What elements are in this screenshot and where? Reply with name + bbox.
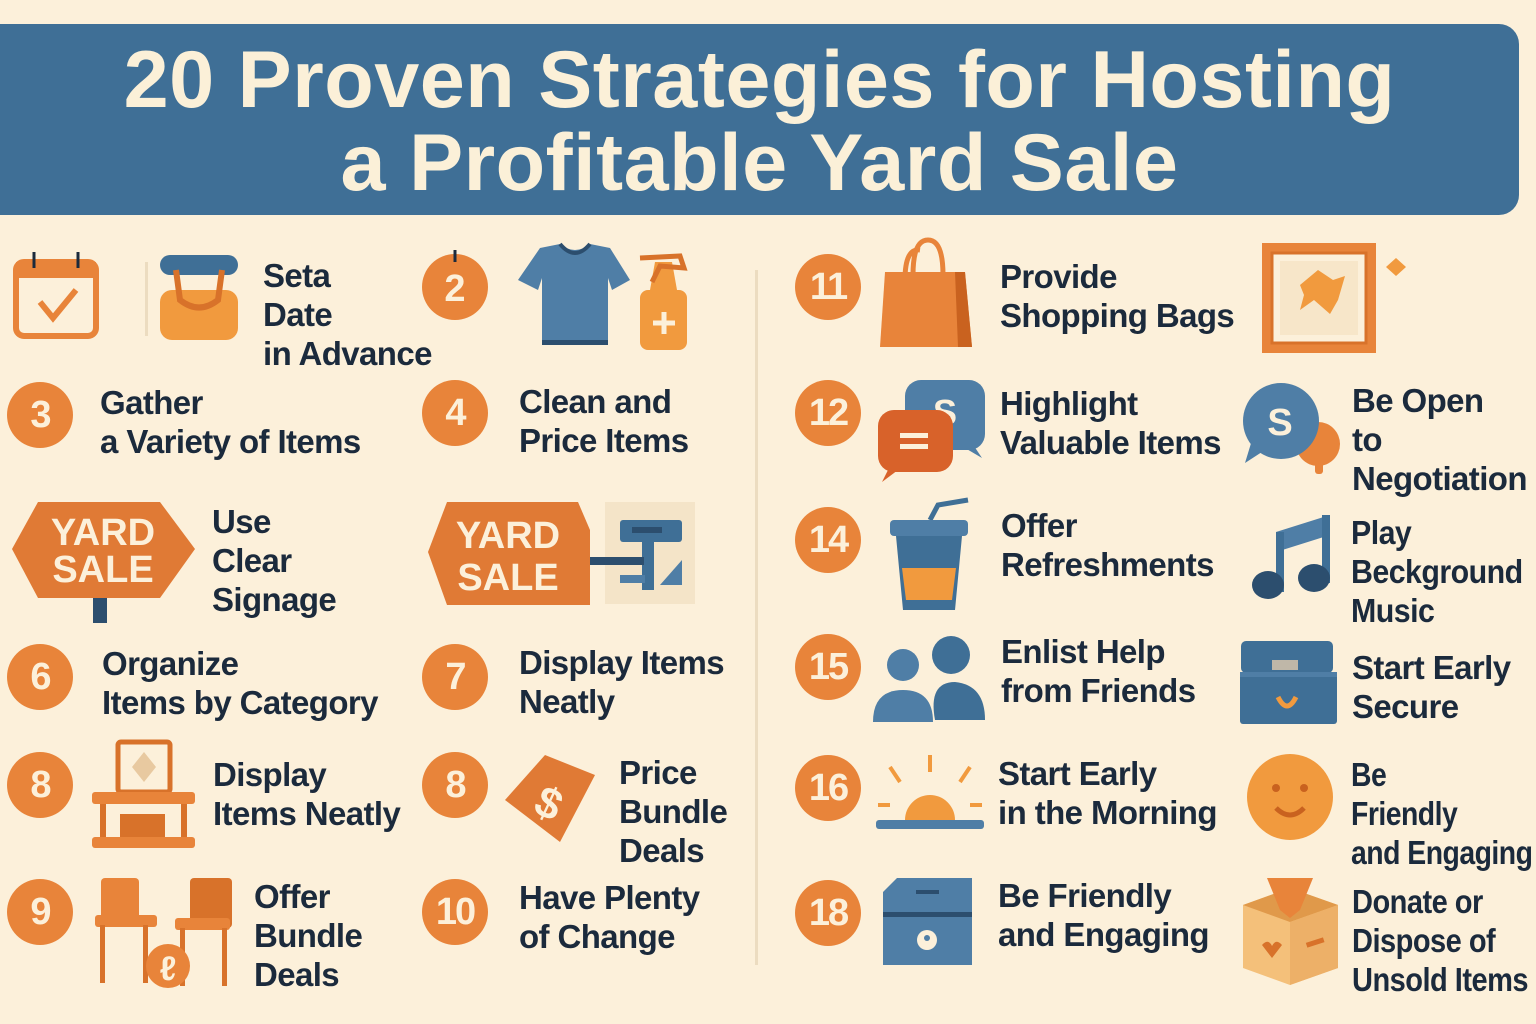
text: gather variety bbox=[100, 384, 361, 460]
icon: calendar bbox=[16, 252, 96, 336]
text: set a date: Date bbox=[263, 296, 332, 333]
text: set a date bbox=[263, 257, 432, 372]
icon: chairs: ℓ bbox=[160, 950, 176, 988]
text: start early secure: Start Early bbox=[1352, 649, 1510, 686]
icon: sunrise bbox=[876, 755, 984, 829]
text: clean and price: Price Items bbox=[519, 422, 689, 459]
text: price bundle deals: Price bbox=[619, 754, 697, 791]
text: enlist help bbox=[1001, 633, 1196, 709]
circle 3: 3 bbox=[30, 394, 50, 436]
text: price bundle deals: Deals bbox=[619, 832, 704, 869]
text: clean and price: Clean and bbox=[519, 383, 671, 420]
text: be friendly right: Friendly bbox=[1351, 795, 1457, 832]
circle 18: 18 bbox=[809, 892, 847, 934]
text: start early morning: Start Early bbox=[998, 755, 1156, 792]
circle 7: 7 bbox=[445, 656, 465, 698]
icon: price tag: $ bbox=[527, 776, 570, 831]
text: gather variety: Gather bbox=[100, 384, 203, 421]
circle 15 bbox=[795, 634, 861, 700]
text: offer bundle deals bbox=[254, 878, 362, 993]
circle 15: 15 bbox=[809, 646, 847, 688]
text: music: Beckground bbox=[1351, 553, 1523, 590]
icon: donation box bbox=[1243, 878, 1338, 985]
text: gather variety: a Variety of Items bbox=[100, 423, 361, 460]
title banner: 20 Proven Strategies for Hosting bbox=[124, 35, 1395, 125]
text: donate: Dispose of bbox=[1352, 922, 1495, 959]
text: refreshments bbox=[1001, 507, 1214, 583]
text: clear signage bbox=[212, 503, 336, 618]
circle 8 right: 8 bbox=[445, 764, 465, 806]
icon: yard sale sign 1: SALE bbox=[52, 549, 154, 591]
circle 11: 11 bbox=[810, 266, 846, 308]
text: clean and price bbox=[519, 383, 689, 459]
text: highlight valuable bbox=[1000, 385, 1221, 461]
icon: negotiation bubble: S bbox=[1267, 402, 1293, 444]
text: set a date: in Advance bbox=[263, 335, 432, 372]
circle 10: 10 bbox=[436, 891, 474, 933]
text: be friendly: Be Friendly bbox=[998, 877, 1171, 914]
circle 10 bbox=[422, 879, 488, 945]
circle 12: 12 bbox=[809, 392, 847, 434]
text: enlist help: from Friends bbox=[1001, 672, 1196, 709]
circle 18 bbox=[795, 880, 861, 946]
circle 2: 2 bbox=[444, 268, 466, 310]
text: negotiation: Negotiation bbox=[1352, 460, 1527, 497]
circle 6: 6 bbox=[30, 656, 50, 698]
icon: shopping bag bbox=[880, 240, 972, 347]
text: start early secure: Secure bbox=[1352, 688, 1458, 725]
column divider bbox=[755, 270, 758, 965]
icon: chat bubbles bbox=[878, 380, 985, 482]
text: start early secure bbox=[1352, 649, 1511, 725]
icon: chairs bbox=[95, 878, 232, 988]
text: donate bbox=[1352, 883, 1528, 998]
icon: music note bbox=[1252, 515, 1330, 599]
text: clear signage: Clear bbox=[212, 542, 292, 579]
text: music: Music bbox=[1351, 592, 1434, 629]
circle 16 bbox=[795, 755, 861, 821]
circle 6 bbox=[7, 644, 73, 710]
text: set a date: Seta bbox=[263, 257, 330, 294]
circle 12 bbox=[795, 380, 861, 446]
text: refreshments: Refreshments bbox=[1001, 546, 1214, 583]
text: donate: Donate or bbox=[1352, 883, 1483, 920]
text: be friendly bbox=[998, 877, 1209, 953]
text: offer bundle deals: Deals bbox=[254, 956, 339, 993]
icon: yard sale sign 1 bbox=[12, 502, 195, 623]
icon: yard sale sign 2 with stand bbox=[428, 502, 695, 605]
title banner bbox=[0, 24, 1519, 215]
circle 3 bbox=[7, 382, 73, 448]
text: price bundle deals bbox=[619, 754, 727, 869]
icon: picture frame bbox=[1262, 243, 1406, 353]
circle 16: 16 bbox=[809, 767, 847, 809]
icon: t-shirt and spray bbox=[518, 244, 687, 350]
text: clear signage: Use bbox=[212, 503, 271, 540]
text: shopping bags bbox=[1000, 258, 1234, 334]
icon: friends bbox=[873, 636, 985, 722]
circle 2 bbox=[422, 250, 488, 320]
icon: display furniture bbox=[92, 742, 195, 848]
text: shopping bags: Provide bbox=[1000, 258, 1117, 295]
text: plenty of change: of Change bbox=[519, 918, 675, 955]
text: music: Play bbox=[1351, 514, 1411, 551]
text: be friendly: and Engaging bbox=[998, 916, 1209, 953]
text: price bundle deals: Bundle bbox=[619, 793, 727, 830]
text: display neatly 7 bbox=[519, 644, 724, 720]
text: highlight valuable: Valuable Items bbox=[1000, 424, 1221, 461]
text: display neatly 7: Neatly bbox=[519, 683, 614, 720]
icon: drink cup bbox=[890, 500, 968, 610]
circle 14: 14 bbox=[809, 519, 847, 561]
title banner: a Profitable Yard Sale bbox=[341, 118, 1178, 208]
icon: cash box bbox=[1240, 641, 1337, 724]
text: negotiation: to bbox=[1352, 421, 1382, 458]
text: enlist help: Enlist Help bbox=[1001, 633, 1165, 670]
text: offer bundle deals: Bundle bbox=[254, 917, 362, 954]
text: negotiation bbox=[1352, 382, 1527, 497]
icon: person with towel bbox=[145, 255, 238, 340]
icon: negotiation bubble bbox=[1243, 383, 1340, 474]
text: be friendly right: Be bbox=[1351, 756, 1386, 793]
circle 11 bbox=[795, 254, 861, 320]
text: start early morning bbox=[998, 755, 1217, 831]
text: be friendly right bbox=[1351, 756, 1532, 871]
icon: smiley bbox=[1247, 754, 1333, 840]
text: clear signage: Signage bbox=[212, 581, 336, 618]
text: plenty of change: Have Plenty bbox=[519, 879, 700, 916]
icon: chat bubbles: S bbox=[933, 392, 957, 433]
text: music bbox=[1351, 514, 1523, 629]
text: start early morning: in the Morning bbox=[998, 794, 1217, 831]
circle 9: 9 bbox=[30, 891, 50, 933]
circle 14 bbox=[795, 507, 861, 573]
icon: yard sale sign 2 with stand: YARD bbox=[456, 515, 560, 557]
icon: price tag bbox=[505, 755, 595, 842]
text: shopping bags: Shopping Bags bbox=[1000, 297, 1234, 334]
text: organize: Items by Category bbox=[102, 684, 378, 721]
text: negotiation: Be Open bbox=[1352, 382, 1484, 419]
text: offer bundle deals: Offer bbox=[254, 878, 330, 915]
circle 8 left: 8 bbox=[30, 764, 50, 806]
circle 4: 4 bbox=[445, 392, 465, 434]
circle 7 bbox=[422, 644, 488, 710]
circle 4 bbox=[422, 380, 488, 446]
icon: yard sale sign 2 with stand: SALE bbox=[457, 557, 559, 599]
text: plenty of change bbox=[519, 879, 700, 955]
icon: yard sale sign 1: YARD bbox=[51, 512, 155, 554]
text: donate: Unsold Items bbox=[1352, 961, 1528, 998]
circle 8 left bbox=[7, 752, 73, 818]
text: organize: Organize bbox=[102, 645, 238, 682]
text: display neatly 8 bbox=[213, 756, 401, 832]
icon: blue box bbox=[883, 878, 972, 965]
circle 9 bbox=[7, 879, 73, 945]
text: display neatly 8: Items Neatly bbox=[213, 795, 400, 832]
text: highlight valuable: Highlight bbox=[1000, 385, 1138, 422]
text: display neatly 7: Display Items bbox=[519, 644, 724, 681]
text: display neatly 8: Display bbox=[213, 756, 326, 793]
text: be friendly right: and Engaging bbox=[1351, 834, 1532, 871]
text: organize bbox=[102, 645, 378, 721]
circle 8 right bbox=[422, 752, 488, 818]
text: refreshments: Offer bbox=[1001, 507, 1077, 544]
